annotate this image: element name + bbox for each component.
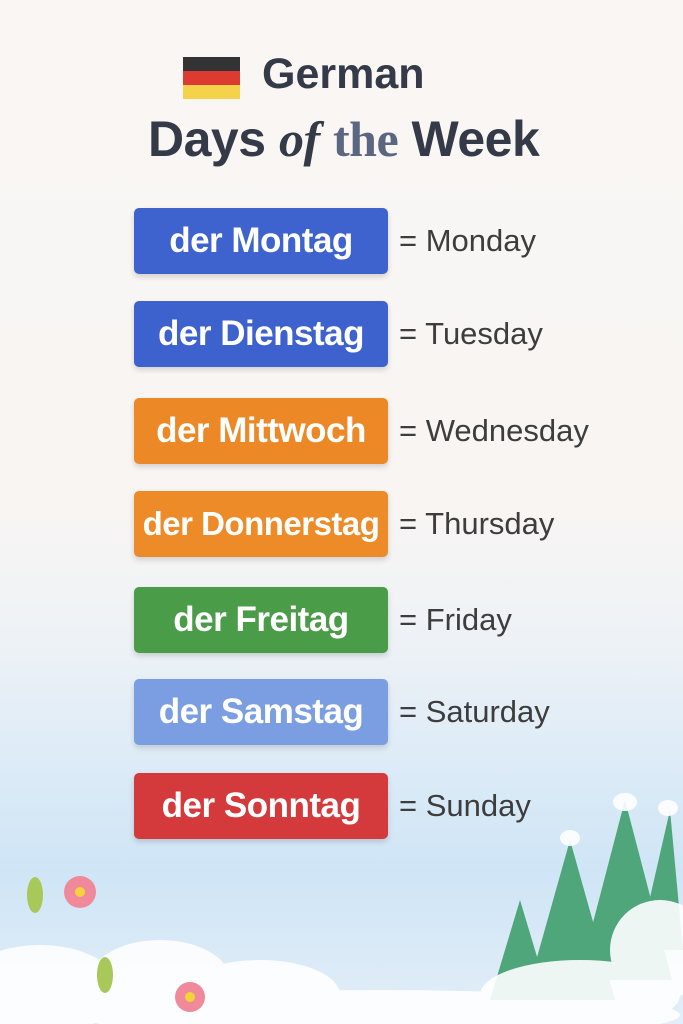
row: Donnerstag: der Donnerstag bbox=[143, 505, 379, 542]
row: Donnerstag bbox=[132, 491, 554, 562]
row: Dienstag bbox=[132, 301, 543, 372]
row: Dienstag: der Dienstag bbox=[158, 314, 364, 353]
row: Montag: der Montag bbox=[169, 221, 353, 260]
row: Mittwoch: = Wednesday bbox=[399, 413, 589, 448]
row: Mittwoch bbox=[132, 398, 589, 469]
icon: German flag bbox=[183, 57, 240, 99]
row: Freitag: der Freitag bbox=[173, 600, 349, 639]
row: Samstag: der Samstag bbox=[159, 692, 363, 731]
trees bbox=[490, 800, 683, 1000]
row: Samstag bbox=[132, 679, 550, 750]
row: Sonntag: = Sunday bbox=[399, 788, 531, 823]
flowers bbox=[27, 876, 205, 1012]
row: Montag: = Monday bbox=[399, 223, 536, 258]
row: Mittwoch: der Mittwoch bbox=[156, 411, 366, 450]
row: Sonntag bbox=[132, 773, 531, 844]
row: Donnerstag: = Thursday bbox=[399, 506, 554, 541]
row: Sonntag: der Sonntag bbox=[162, 786, 360, 825]
title: German bbox=[262, 50, 425, 98]
title bbox=[148, 50, 540, 167]
row: Samstag: = Saturday bbox=[399, 694, 550, 729]
row: Freitag bbox=[132, 587, 512, 658]
row: Freitag: = Friday bbox=[399, 602, 512, 637]
winter scene bbox=[0, 793, 683, 1024]
row: Dienstag: = Tuesday bbox=[399, 316, 543, 351]
title: Days of the Week bbox=[148, 111, 539, 167]
row: Montag bbox=[132, 208, 536, 279]
